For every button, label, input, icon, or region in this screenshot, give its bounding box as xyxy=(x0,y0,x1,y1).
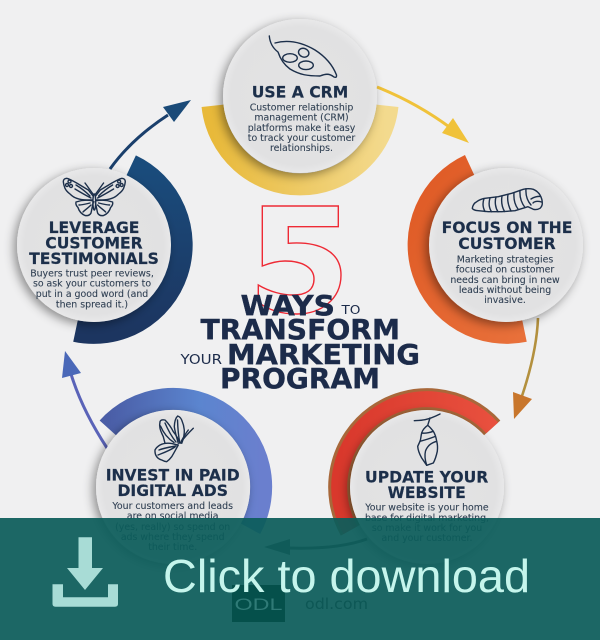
text block: Your website is your home xyxy=(364,503,489,514)
icon: chrysalis xyxy=(414,414,440,465)
download banner xyxy=(0,518,600,640)
text block: Customer relationship xyxy=(250,103,353,114)
text block: management (CRM) xyxy=(254,113,349,124)
logo: odl.com xyxy=(305,595,368,613)
heading: CUSTOMER xyxy=(458,235,556,253)
text block: Your customers and leads xyxy=(111,501,233,512)
text block xyxy=(364,503,489,544)
call to action: Click to download xyxy=(163,550,530,602)
heading: DIGITAL ADS xyxy=(117,482,228,500)
heading xyxy=(442,219,572,253)
text block xyxy=(30,269,154,311)
title: MARKETING xyxy=(227,338,420,371)
text block xyxy=(111,501,233,553)
icon: caterpillar xyxy=(472,189,542,212)
text block: are on social media xyxy=(127,511,219,522)
text block xyxy=(450,255,560,306)
arrow: website to ads xyxy=(264,539,367,555)
text block: platforms make it easy xyxy=(248,123,356,134)
title: TRANSFORM xyxy=(200,313,400,346)
numeral 5 outline xyxy=(258,206,341,314)
text block: focused on customer xyxy=(456,265,554,276)
heading: LEVERAGE xyxy=(49,219,139,237)
logo: ODL xyxy=(234,595,282,614)
text block: relationships. xyxy=(270,143,333,154)
arrow: testimonials to CRM xyxy=(110,100,191,169)
text block: so make it work for you xyxy=(372,523,482,534)
icon: leaf with eggs xyxy=(269,36,337,77)
text block: ads where they spend xyxy=(121,532,225,543)
text block: their time. xyxy=(148,542,197,553)
text block: leads without being xyxy=(459,285,551,296)
panel: update your website xyxy=(339,399,504,564)
text block: Marketing strategies xyxy=(457,255,553,266)
heading: CUSTOMER xyxy=(45,235,143,253)
text block: then spread it.) xyxy=(56,300,128,311)
logo xyxy=(232,585,368,622)
heading xyxy=(29,219,159,268)
text block: and your customer. xyxy=(382,533,472,544)
text block xyxy=(248,103,356,154)
text block: invasive. xyxy=(484,295,526,306)
arrow: ads to testimonials xyxy=(62,351,107,448)
text block: so ask your customers to xyxy=(33,279,151,290)
icon: butterfly xyxy=(63,178,125,216)
heading xyxy=(365,469,488,502)
title: YOUR xyxy=(179,352,222,368)
title xyxy=(179,289,420,395)
heading: FOCUS ON THE xyxy=(442,219,572,237)
arrow: CRM to customer xyxy=(377,87,469,143)
heading: INVEST IN PAID xyxy=(106,467,240,485)
text block: (yes, really) so spend on xyxy=(115,522,230,533)
title: WAYS xyxy=(240,289,335,322)
panel: leverage customer testimonials xyxy=(17,165,182,333)
panel: use a CRM xyxy=(212,19,388,184)
heading: USE A CRM xyxy=(252,84,348,102)
text block: base for digital marketing, xyxy=(365,513,489,524)
icon: download xyxy=(52,537,118,607)
arrow: customer to website xyxy=(513,318,538,419)
heading: TESTIMONIALS xyxy=(29,250,159,268)
title: PROGRAM xyxy=(220,362,380,395)
heading: WEBSITE xyxy=(388,484,466,502)
icon: side butterfly xyxy=(155,416,193,462)
text block: needs can bring in new xyxy=(450,275,560,286)
text block: to track your customer xyxy=(248,133,355,144)
heading: UPDATE YOUR xyxy=(365,469,488,487)
panel: invest in paid digital ads xyxy=(96,399,261,564)
panel: focus on the customer xyxy=(419,165,583,333)
text block: put in a good word (and xyxy=(36,289,148,300)
heading xyxy=(106,467,240,500)
text block: Buyers trust peer reviews, xyxy=(30,269,154,280)
title: TO xyxy=(340,302,361,317)
